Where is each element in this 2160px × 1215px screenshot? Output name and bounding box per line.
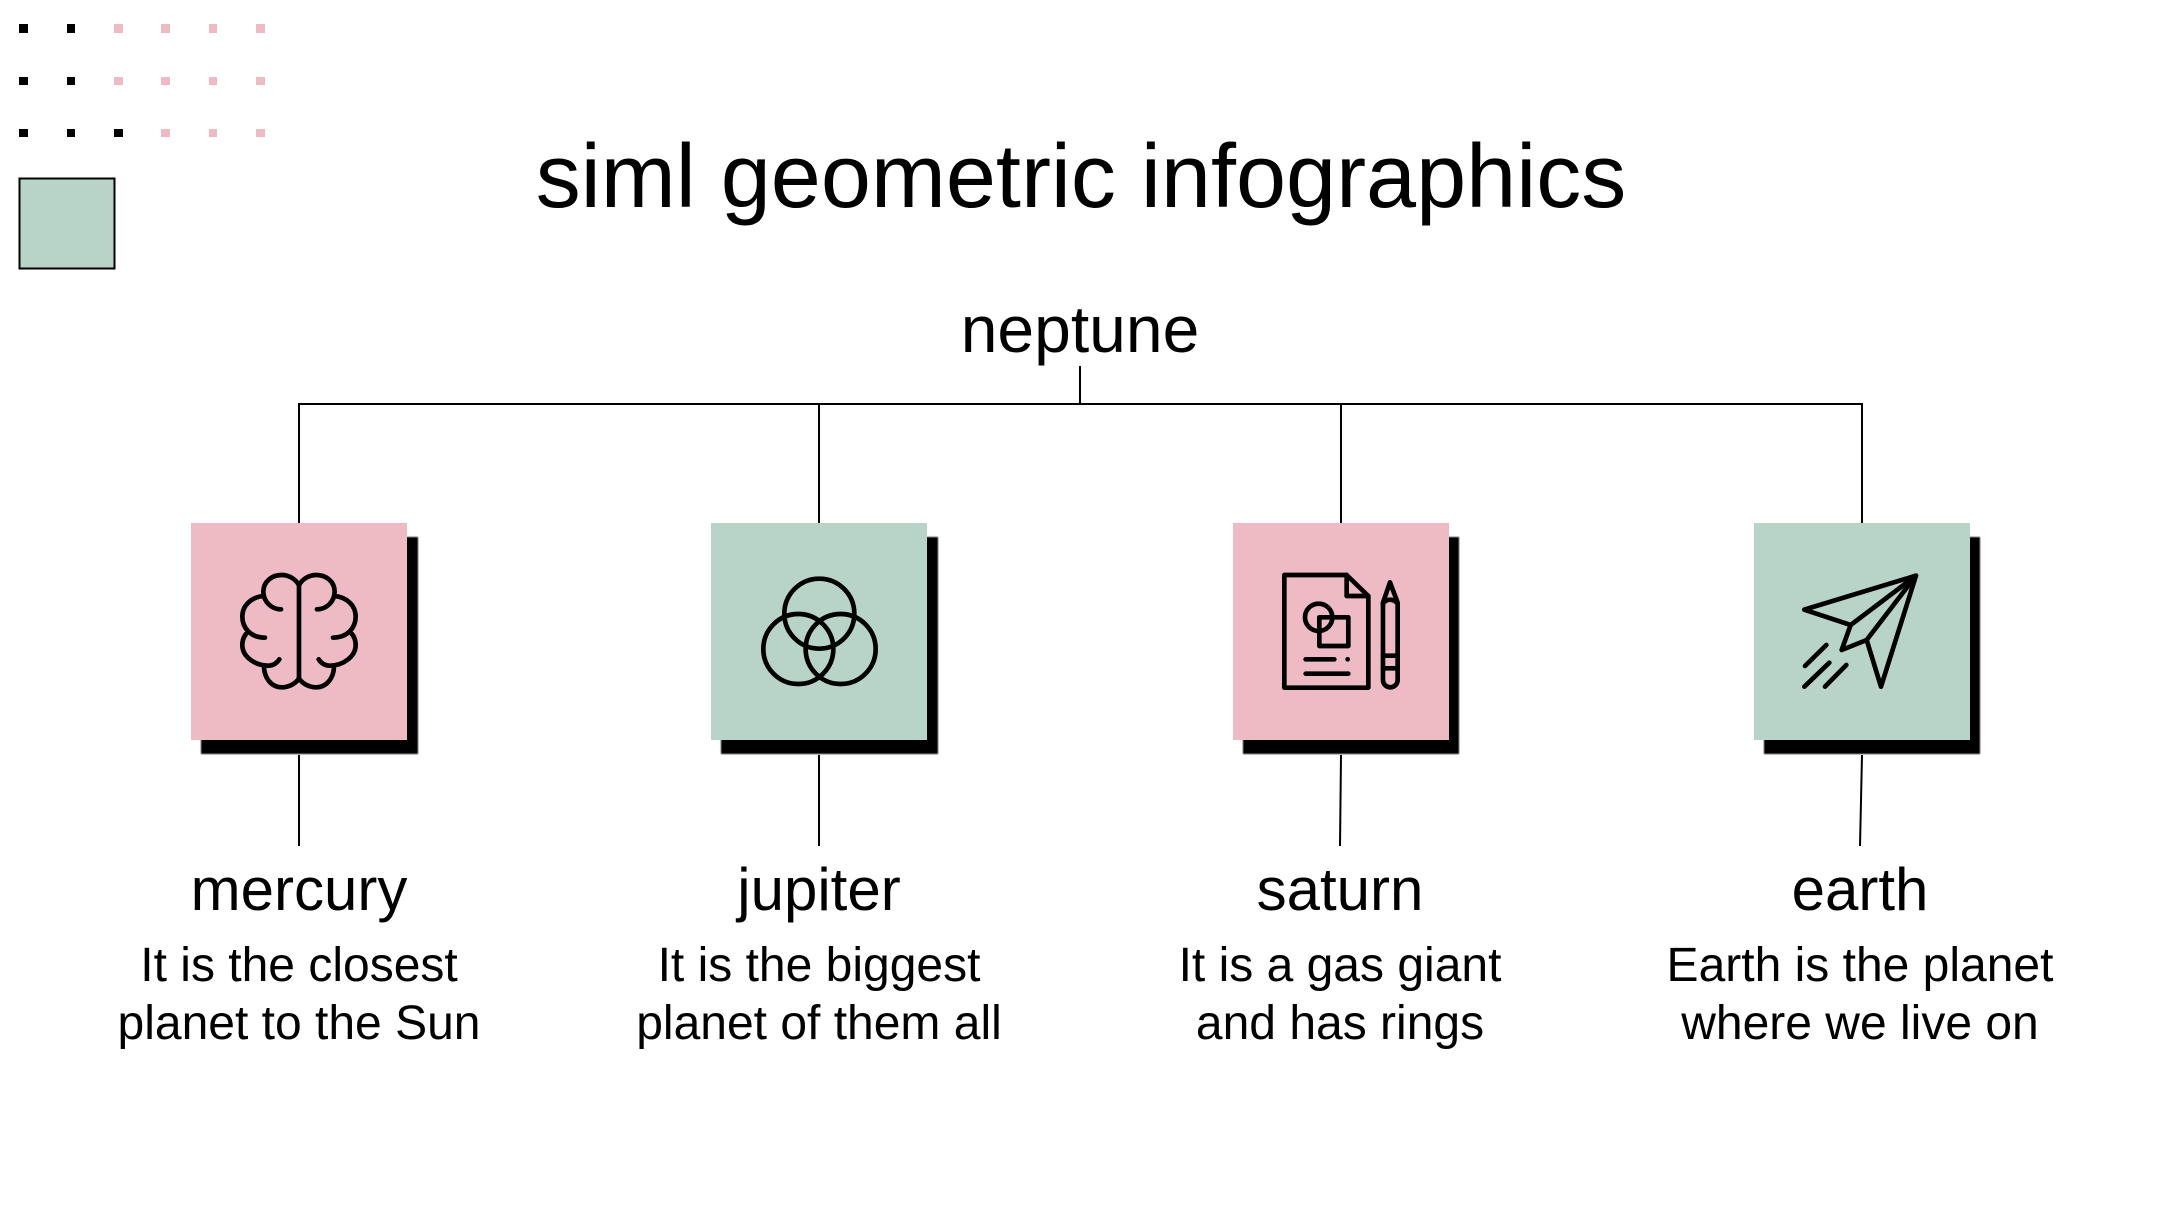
icon: document and pencil [1284,575,1398,688]
label: jupiter [636,856,1002,1050]
description: mercury: planet to the Sun [118,997,480,1050]
label: earth: earth [1792,856,1928,923]
decorative green square [20,178,114,268]
description: jupiter: It is the biggest [658,939,980,992]
label: jupiter: jupiter [735,856,901,923]
icon: three overlapping circles [763,579,876,684]
label: saturn: saturn [1257,856,1423,923]
label: mercury: mercury [191,856,407,923]
heading: neptune: neptune [961,292,1199,366]
description: jupiter: planet of them all [636,997,1002,1050]
card: mercury [191,523,418,754]
icon: paper plane [1804,576,1916,687]
label: saturn [1179,856,1501,1050]
label: earth [1667,856,2053,1050]
title: siml geometric infographics [536,127,1626,227]
card: earth [1754,523,1980,754]
connector tree from neptune to cards [299,366,1862,846]
description: saturn: It is a gas giant [1179,939,1501,992]
card: saturn [1233,523,1459,754]
description: earth: where we live on [1680,997,2039,1050]
label: mercury [118,856,480,1050]
description: earth: Earth is the planet [1667,939,2053,992]
description: saturn: and has rings [1196,997,1484,1050]
icon: brain [242,575,356,687]
card: jupiter [711,523,938,754]
decorative dot grid [19,24,265,137]
description: mercury: It is the closest [140,939,458,992]
